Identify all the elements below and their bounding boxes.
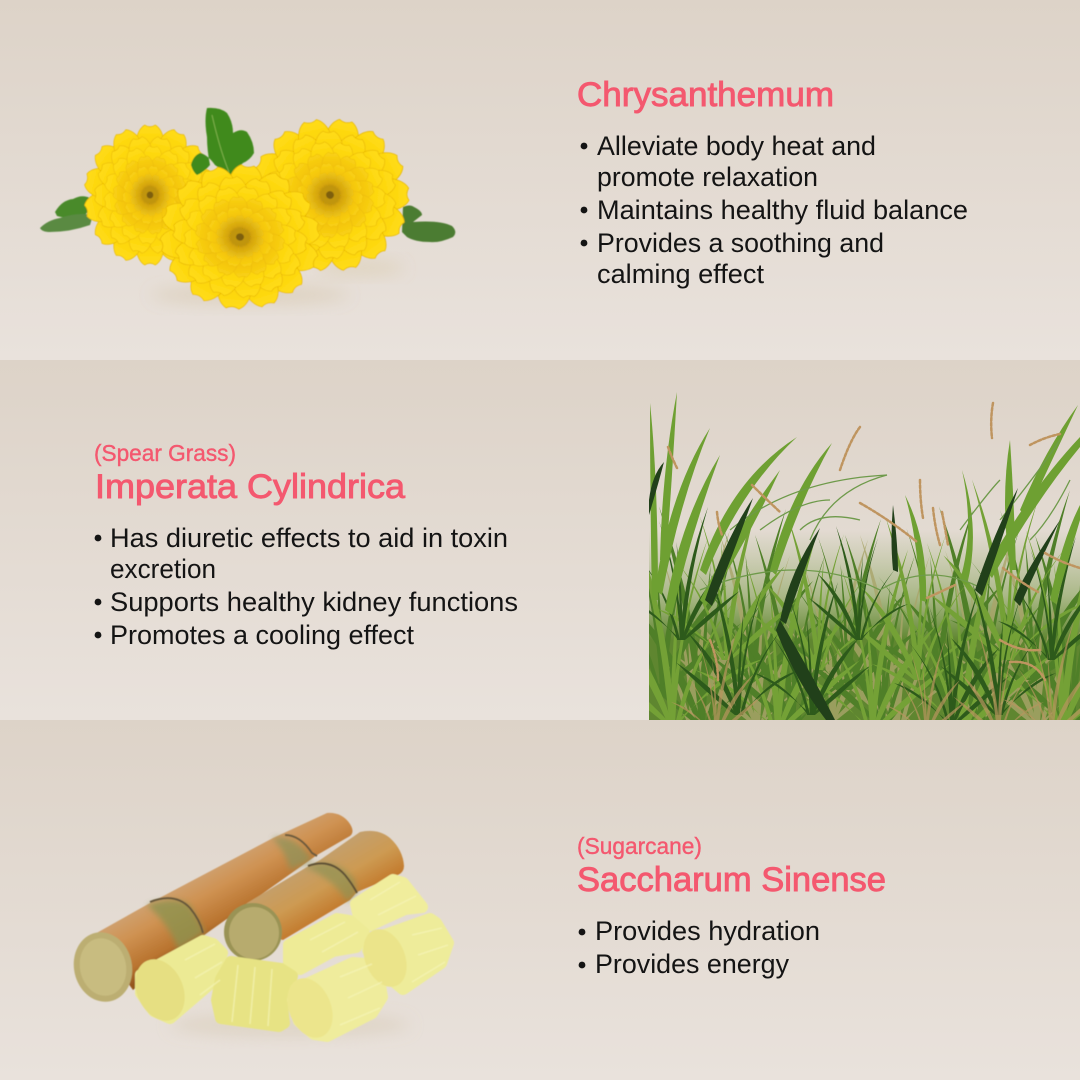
panel: chrysanthemum (0, 0, 1080, 360)
panel background (0, 0, 1080, 360)
benefits list: chrysanthemum: Alleviate body heat and (597, 131, 876, 161)
subheading: Spear Grass: (Spear Grass) (94, 440, 236, 466)
benefits list: sugarcane: Provides hydration (595, 916, 820, 946)
illustration: spear grass field (649, 392, 1080, 720)
heading: Chrysanthemum: Chrysanthemum (577, 76, 834, 114)
benefits list: imperata: Has diuretic effects to aid in toxin (110, 523, 508, 553)
benefits list: chrysanthemum (581, 131, 968, 289)
illustration: sugarcane stalks and pieces (67, 813, 448, 1045)
benefits list: imperata: excretion (110, 554, 216, 584)
benefits list: imperata (95, 523, 518, 650)
benefits list: imperata: Promotes a cooling effect (110, 620, 414, 650)
heading: Imperata Cylindrica: Imperata Cylindrica (95, 468, 405, 506)
panel background (0, 360, 1080, 720)
benefits list: chrysanthemum: Maintains healthy fluid balance (597, 195, 968, 225)
panel: saccharum sinense (0, 720, 1080, 1080)
heading: Saccharum Sinense: Saccharum Sinense (577, 861, 886, 899)
subheading: Sugarcane: (Sugarcane) (577, 833, 702, 859)
panel background (0, 720, 1080, 1080)
benefits list: sugarcane (579, 916, 820, 979)
panel: imperata cylindrica (0, 360, 1080, 735)
benefits list: imperata: Supports healthy kidney functions (110, 587, 518, 617)
illustration: chrysanthemum flowers (40, 103, 455, 318)
benefits list: chrysanthemum: promote relaxation (597, 162, 818, 192)
benefits list: sugarcane: Provides energy (595, 949, 789, 979)
benefits list: chrysanthemum: Provides a soothing and (597, 228, 884, 258)
benefits list: chrysanthemum: calming effect (597, 259, 764, 289)
